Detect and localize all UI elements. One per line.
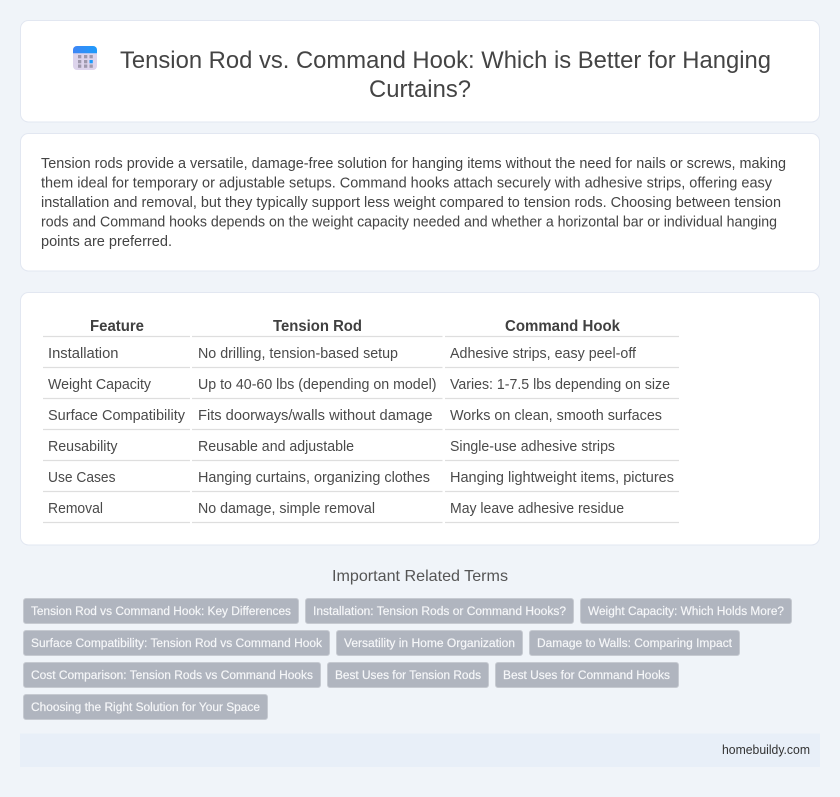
panel: introduction text: them ideal for temporary or adjustable setups. Command hooks attach securely with adhesive strips, offering easy <box>41 176 773 192</box>
panel: comparison table <box>20 292 820 545</box>
tag <box>580 598 792 624</box>
tag: Cost Comparison: Tension Rods vs Command Hooks <box>31 668 313 682</box>
panel: introduction text: rods and Command hooks depends on the weight capacity needed and whether a horizontal bar or individual hanging <box>41 214 777 230</box>
tag <box>24 694 268 720</box>
row: reusability: Single-use adhesive strips <box>450 439 615 455</box>
panel: header <box>20 20 820 122</box>
row: use cases: Use Cases <box>48 470 116 486</box>
row: surface compatibility: Fits doorways/walls without damage <box>198 408 432 424</box>
row: installation: Installation <box>48 346 118 362</box>
row: use cases: Hanging lightweight items, pictures <box>450 470 674 486</box>
tag: Best Uses for Tension Rods <box>335 668 481 682</box>
tag <box>24 598 298 624</box>
icon: calendar <box>73 46 97 70</box>
row: removal: Removal <box>48 501 103 517</box>
tag <box>328 662 488 688</box>
row: reusability: Reusable and adjustable <box>198 439 354 455</box>
tag: Surface Compatibility: Tension Rod vs Command Hook <box>31 636 323 650</box>
table header row: Tension Rod <box>273 318 362 335</box>
tag <box>306 598 574 624</box>
tag: Weight Capacity: Which Holds More? <box>588 604 784 618</box>
panel: introduction text: points are preferred. <box>41 234 172 250</box>
tag: Tension Rod vs Command Hook: Key Differences <box>31 604 291 618</box>
heading: important related terms: Important Related Terms <box>332 568 508 585</box>
tag <box>24 662 320 688</box>
row: weight capacity <box>48 377 670 393</box>
row: surface compatibility: Works on clean, smooth surfaces <box>450 408 662 424</box>
row: reusability: Reusability <box>48 439 118 455</box>
tag: Choosing the Right Solution for Your Space <box>31 700 260 714</box>
tag group: related terms <box>24 598 792 720</box>
row: weight capacity: Weight Capacity <box>48 377 152 393</box>
footer: homebuildy.com <box>722 743 810 757</box>
tag: Best Uses for Command Hooks <box>503 668 670 682</box>
panel: introduction text: Tension rods provide a versatile, damage-free solution for hanging items without the need for nails or screws, making <box>41 156 786 172</box>
panel: introduction text: installation and removal, but they typically support less weight compared to tension rods. Choosing between tension <box>41 195 781 211</box>
tag: Installation: Tension Rods or Command Hooks? <box>313 604 566 618</box>
row: surface compatibility <box>48 408 662 424</box>
row: installation: Adhesive strips, easy peel-off <box>450 346 637 362</box>
table header row <box>90 318 620 335</box>
row: installation <box>48 346 637 362</box>
row: installation: No drilling, tension-based setup <box>198 346 398 362</box>
row: weight capacity: Varies: 1-7.5 lbs depending on size <box>450 377 670 393</box>
tag <box>530 630 740 656</box>
title: Curtains? <box>369 76 471 103</box>
row: removal: No damage, simple removal <box>198 501 375 517</box>
table header row: Feature <box>90 318 144 335</box>
row: use cases <box>48 470 674 486</box>
row: reusability <box>48 439 615 455</box>
panel: introduction text <box>20 134 820 271</box>
table header row: Command Hook <box>505 318 620 335</box>
row: use cases: Hanging curtains, organizing clothes <box>198 470 430 486</box>
tag: Damage to Walls: Comparing Impact <box>537 636 733 650</box>
row: weight capacity: Up to 40-60 lbs (depending on model) <box>198 377 436 393</box>
footer <box>20 734 820 767</box>
title: Tension Rod vs. Command Hook: Which is Better for Hanging <box>120 47 771 74</box>
row: removal <box>48 501 624 517</box>
tag: Versatility in Home Organization <box>344 636 515 650</box>
tag <box>496 662 678 688</box>
row: removal: May leave adhesive residue <box>450 501 624 517</box>
row: surface compatibility: Surface Compatibility <box>48 408 186 424</box>
title <box>120 47 771 103</box>
tag <box>24 630 330 656</box>
tag <box>336 630 522 656</box>
